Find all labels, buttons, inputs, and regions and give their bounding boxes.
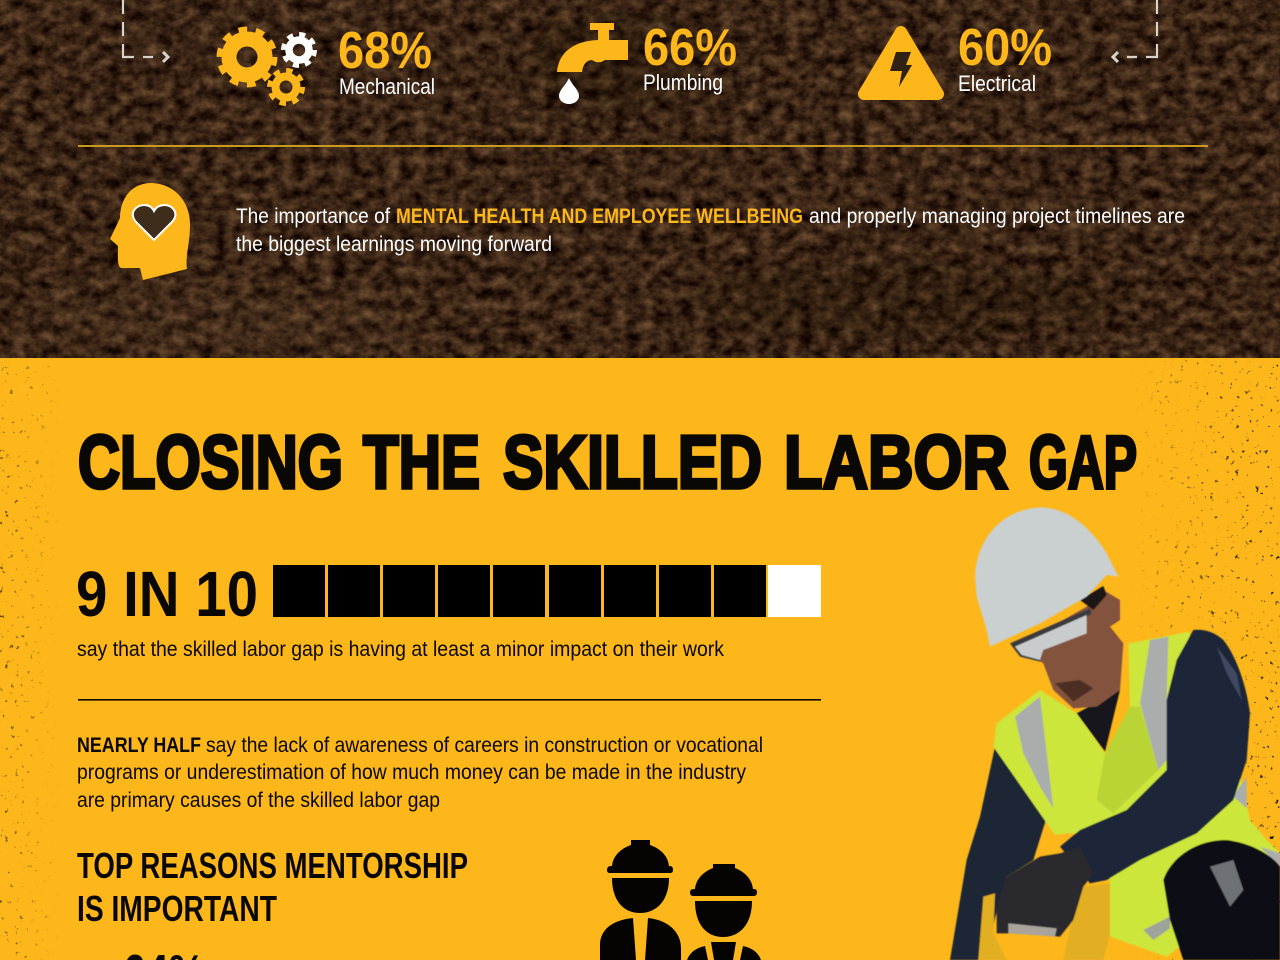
title: THE bbox=[363, 420, 480, 504]
icon: gears bbox=[220, 30, 314, 104]
text block: mental health learning: the biggest learnings moving forward bbox=[236, 232, 552, 256]
stat: electrical 60%: Electrical bbox=[958, 71, 1036, 96]
icon: mentor workers with hard hats bbox=[600, 840, 761, 960]
stat: electrical 60%: 60% bbox=[958, 19, 1052, 77]
stat: electrical 60% bbox=[958, 19, 1052, 96]
title: CLOSING bbox=[78, 420, 343, 504]
stat: mechanical 68%: 68% bbox=[338, 22, 432, 80]
text block: nearly half: NEARLY HALF bbox=[77, 733, 201, 757]
text block: nearly half: say the lack of awareness of careers in construction or vocational bbox=[206, 733, 763, 757]
panel: yellow section background bbox=[0, 358, 1280, 960]
text block: nearly half bbox=[77, 733, 763, 812]
photo: construction worker illustration bbox=[950, 507, 1280, 960]
title: SKILLED bbox=[503, 420, 762, 504]
chart: 9 of 10 bar bbox=[273, 565, 821, 617]
text: 9 in 10 caption: say that the skilled labor gap is having at least a minor impact on their work bbox=[77, 637, 724, 661]
title: LABOR bbox=[784, 420, 1008, 504]
icon: faucet with water drop bbox=[557, 23, 628, 104]
title bbox=[78, 420, 1137, 504]
text block: mental health learning: and properly managing project timelines are bbox=[809, 204, 1185, 228]
heading: top reasons mentorship bbox=[77, 845, 468, 929]
text block: nearly half: programs or underestimation of how much money can be made in the industry bbox=[77, 760, 746, 784]
text block: mental health learning: MENTAL HEALTH AND EMPLOYEE WELLBEING bbox=[396, 204, 803, 228]
panel: soil background bbox=[0, 0, 1280, 358]
stat: 9 in 10: 9 IN 10 bbox=[76, 558, 258, 630]
arrow: right dashed bracket bbox=[1113, 0, 1157, 62]
heading: top reasons mentorship: IS IMPORTANT bbox=[77, 888, 277, 929]
grunge speckle texture bbox=[0, 358, 1280, 960]
stat: plumbing 66%: Plumbing bbox=[643, 70, 723, 95]
text block: nearly half: are primary causes of the skilled labor gap bbox=[77, 788, 440, 812]
heading: top reasons mentorship: TOP REASONS MENTORSHIP bbox=[77, 845, 468, 886]
text block: mental health learning: The importance of bbox=[236, 204, 390, 228]
icon: head with heart bbox=[110, 183, 190, 280]
stat: plumbing 66%: 66% bbox=[643, 19, 737, 77]
icon: electrical warning triangle bbox=[864, 32, 938, 94]
text block: mental health learning bbox=[236, 204, 1185, 256]
stat: mechanical 68%: Mechanical bbox=[339, 74, 435, 99]
arrow: left dashed bracket bbox=[123, 0, 168, 62]
title: GAP bbox=[1029, 420, 1137, 504]
